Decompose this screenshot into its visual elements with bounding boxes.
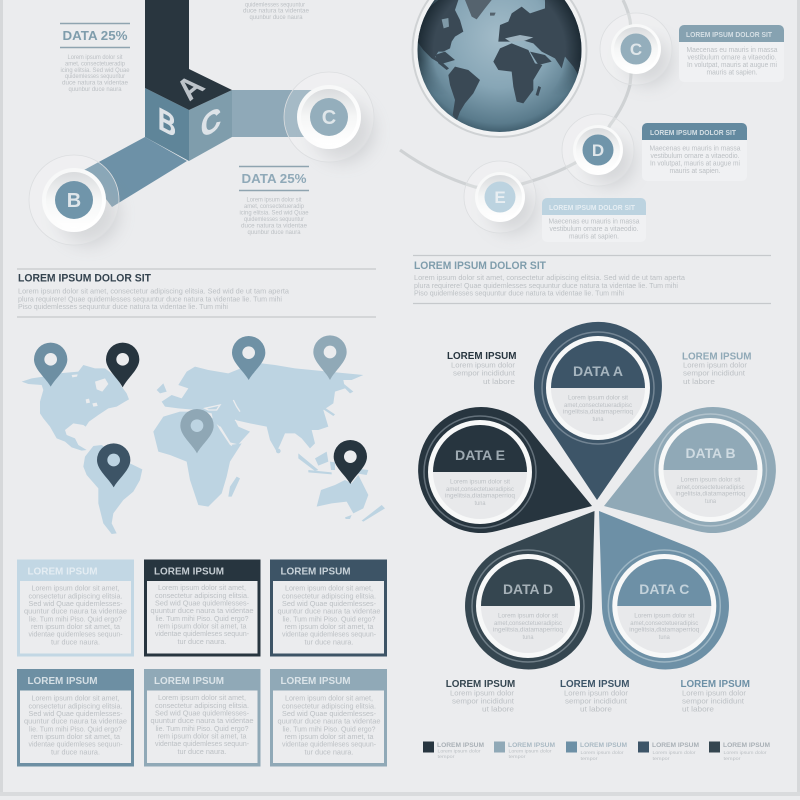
label: bottom left: LOREM IPSUM xyxy=(446,679,515,690)
label box: C: Maecenas eu mauris in massa xyxy=(686,47,778,54)
card 2: Lorem ipsum dolor sit amet, xyxy=(158,585,246,592)
card 3: tur duce naura. xyxy=(304,640,354,646)
node: D: D xyxy=(592,141,604,160)
callout: data 25% right: quunbur duce naura xyxy=(248,230,301,236)
callout: data 25% left: amet, consectetueradip xyxy=(65,62,126,68)
callout: data 25% left: DATA 25% xyxy=(62,29,128,43)
node: E xyxy=(464,161,536,233)
text block: left heading and paragraph: Lorem ipsum dolor sit amet, consectetur adipiscing elitsia. Sed wid de ut tam aperta xyxy=(18,286,290,296)
petal C: ingelitsia,diatamaperrioq xyxy=(629,628,699,634)
legend item 2 xyxy=(494,742,555,760)
label: top right: LOREM IPSUM xyxy=(682,352,752,362)
card 1: rem ipsum dolor sit amet, ta xyxy=(31,624,120,631)
card 6: rem ipsum dolor sit amet, ta xyxy=(284,734,374,741)
petal E: amet,consectetueradipisc xyxy=(446,487,514,493)
card 4 xyxy=(17,669,134,766)
petal E: DATA E xyxy=(455,448,505,463)
card 1: quuntur duce naura ta videntae xyxy=(24,609,127,616)
label box: C xyxy=(679,25,784,82)
africa xyxy=(153,412,242,507)
callout: data 25% right: quidemlesses sequuntur xyxy=(244,217,304,223)
card 6: Lorem ipsum dolor sit amet, xyxy=(285,696,373,702)
text block: cropped caption top xyxy=(243,2,310,21)
card 5: videntae quidemleses sequun- xyxy=(155,741,250,748)
americas xyxy=(22,365,142,534)
callout: data 25% left xyxy=(60,24,130,93)
world map xyxy=(22,363,385,534)
label box: D: Maecenas eu mauris in massa xyxy=(650,146,741,152)
label box: D: In volutpat, mauris at augue mi xyxy=(650,160,740,168)
legend item 1: Lorem ipsum dolor xyxy=(438,748,481,754)
label: bottom centre xyxy=(560,679,630,714)
card 3 xyxy=(270,560,387,656)
callout: data 25% right: amet, consectetueradip xyxy=(244,204,305,210)
legend item 4 xyxy=(638,742,699,762)
card 2: videntae quidemleses sequun- xyxy=(155,631,250,638)
label: top left: sempor incididunt xyxy=(453,370,515,378)
card 1 xyxy=(17,560,134,656)
arm: B bar xyxy=(84,137,187,207)
legend item 3 xyxy=(566,742,627,762)
card 3: Sed wid Quae quidemlesses- xyxy=(282,601,377,608)
petal B: DATA B xyxy=(686,446,736,461)
legend item 1: LOREM IPSUM xyxy=(437,742,484,749)
pin 2 xyxy=(106,343,139,387)
legend xyxy=(423,742,770,762)
card 4: tur duce naura. xyxy=(51,750,100,756)
card 6: tur duce naura. xyxy=(304,750,354,756)
legend item 3: tempor xyxy=(580,756,598,762)
legend item 5: Lorem ipsum dolor xyxy=(724,750,767,756)
card 5: tur duce naura. xyxy=(178,749,227,756)
callout: data 25% left: Lorem ipsum dolor sit xyxy=(68,55,123,61)
card 5: rem ipsum dolor sit amet, ta xyxy=(158,734,247,740)
legend item 5: tempor xyxy=(724,756,741,762)
text block: right heading and paragraph: LOREM IPSUM DOLOR SIT xyxy=(414,260,546,272)
card 5: consectetur adipiscing elitsia. xyxy=(155,703,249,710)
label: bottom left xyxy=(446,679,515,714)
petal E xyxy=(418,407,592,533)
card 2: lie. Tum mihi Piso. Quid ergo? xyxy=(156,616,249,623)
card 1: LOREM IPSUM xyxy=(28,566,98,578)
legend item 4: Lorem ipsum dolor xyxy=(652,750,696,756)
label: bottom left: Lorem ipsum dolor xyxy=(450,690,515,698)
arm: A bar and top face xyxy=(145,0,232,110)
callout: data 25% right: icing elitsia. Sed wid Quae xyxy=(240,210,309,216)
petal A: tuna xyxy=(592,417,604,423)
label: top right: sempor incididunt xyxy=(683,370,745,378)
card 2: LOREM IPSUM xyxy=(154,566,224,578)
petal A xyxy=(534,322,662,500)
text block: cropped caption top: quidemlesses sequuntur xyxy=(245,2,305,8)
label box: C: In volutpat, mauris at augue mi xyxy=(687,62,777,69)
label: top left: LOREM IPSUM xyxy=(447,351,516,362)
pin 6 xyxy=(97,443,130,487)
petal D: Lorem ipsum dolor sit xyxy=(498,614,558,620)
card 1: videntae quidemleses sequun- xyxy=(28,632,123,639)
label: bottom centre: LOREM IPSUM xyxy=(560,679,630,690)
petal A: amet,consectetueradipisc xyxy=(564,403,632,409)
legend item 3: LOREM IPSUM xyxy=(580,742,627,749)
legend item 2: LOREM IPSUM xyxy=(508,742,555,749)
card 4: Sed wid Quae quidemlesses- xyxy=(28,711,123,718)
card 2 xyxy=(144,560,260,656)
petal D: tuna xyxy=(522,635,534,641)
petal D xyxy=(465,511,594,669)
legend item 5: LOREM IPSUM xyxy=(723,742,770,749)
legend item 2: Lorem ipsum dolor xyxy=(508,748,552,754)
label box: C: mauris at sapien. xyxy=(706,70,758,76)
cube letter B: B xyxy=(158,101,176,145)
text block: right heading and paragraph xyxy=(413,256,771,304)
text block: left heading and paragraph: plura requirere! Quae quidemlesses sequuntur duce natura ta videntae lie. Tum mihi xyxy=(18,294,282,304)
card 1: Lorem ipsum dolor sit amet, xyxy=(32,586,120,592)
card 3: videntae quidemleses sequun- xyxy=(282,632,377,639)
card 6: lie. Tum mihi Piso. Quid ergo? xyxy=(282,726,376,733)
card 3: rem ipsum dolor sit amet, ta xyxy=(284,624,374,631)
globe xyxy=(412,0,586,137)
card 2: quuntur duce naura ta videntae xyxy=(150,608,254,615)
panel: globe with connected nodes xyxy=(400,0,784,242)
petal B xyxy=(604,407,776,533)
text block: right heading and paragraph: Piso quidemlesses sequuntur duce natura ta videntae lie. Tum mihi xyxy=(414,288,624,298)
petal D: ingelitsia,diatamaperrioq xyxy=(493,628,563,634)
label: bottom right: ut labore xyxy=(682,706,714,714)
card 2: Sed wid Quae quidemlesses- xyxy=(155,600,250,608)
cube letter C: C xyxy=(201,100,221,145)
label box: E: vestibulum ornare a vitaeodio. xyxy=(550,226,639,233)
callout: data 25% right xyxy=(239,166,309,236)
card 5: Lorem ipsum dolor sit amet, xyxy=(158,695,246,702)
card 3: quuntur duce naura ta videntae xyxy=(278,609,381,616)
legend item 4: tempor xyxy=(652,756,670,762)
card 6: LOREM IPSUM xyxy=(280,676,350,687)
card 5 xyxy=(144,669,260,766)
panel: world map with pins xyxy=(22,335,385,534)
label box: E: Maecenas eu mauris in massa xyxy=(548,218,640,226)
eurasia and oceania xyxy=(157,363,385,522)
label: bottom centre: ut labore xyxy=(580,706,612,714)
petal D: amet,consectetueradipisc xyxy=(494,621,562,627)
cube letter A: A xyxy=(169,68,212,107)
label box: D: vestibulum ornare a vitaeodio. xyxy=(650,153,740,160)
pin 1 xyxy=(34,343,67,387)
petal C xyxy=(599,511,729,669)
petal A: Lorem ipsum dolor sit xyxy=(568,396,628,402)
label: top left xyxy=(447,351,516,386)
pins xyxy=(34,335,367,487)
petal B: Lorem ipsum dolor sit xyxy=(680,478,741,484)
petal B: tuna xyxy=(705,499,717,505)
label box: E xyxy=(542,198,646,242)
label: top left: ut labore xyxy=(483,379,515,386)
card 4: consectetur adipiscing elitsia. xyxy=(28,703,123,710)
card 2: consectetur adipiscing elitsia. xyxy=(155,593,249,600)
card 4: Lorem ipsum dolor sit amet, xyxy=(32,696,120,702)
legend item 3: Lorem ipsum dolor xyxy=(580,750,624,756)
node: B: B xyxy=(67,190,81,212)
petal C: DATA C xyxy=(639,582,690,597)
petal B: ingelitsia,diatamaperrioq xyxy=(676,492,746,498)
cube face: left xyxy=(145,88,189,161)
pin 4 xyxy=(313,335,347,380)
text block: cropped caption top: quunbur duce naura xyxy=(250,15,303,21)
node: B xyxy=(29,155,119,245)
label box: C: vestibulum ornare a vitaeodio. xyxy=(688,54,777,62)
label: bottom left: sempor incididunt xyxy=(452,698,514,706)
arm: C bar xyxy=(232,90,312,137)
label: bottom centre: Lorem ipsum dolor xyxy=(564,690,629,698)
petal D: DATA D xyxy=(503,582,553,597)
label: bottom left: ut labore xyxy=(482,706,514,714)
label: top right: Lorem ipsum dolor xyxy=(683,362,748,370)
panel: five-petal flower chart xyxy=(418,322,776,669)
label box: E: LOREM IPSUM DOLOR SIT xyxy=(549,205,636,212)
petal C: amet,consectetueradipisc xyxy=(630,621,698,627)
label box: D: LOREM IPSUM DOLOR SIT xyxy=(650,130,737,137)
card 4: rem ipsum dolor sit amet, ta xyxy=(31,734,120,741)
legend item 1: tempor xyxy=(438,754,455,760)
callout: data 25% right: Lorem ipsum dolor sit xyxy=(246,198,302,204)
card 1: consectetur adipiscing elitsia. xyxy=(28,593,123,600)
petal A: ingelitsia,diatamaperrioq xyxy=(563,410,633,416)
petal C: Lorem ipsum dolor sit xyxy=(634,614,695,620)
card 4: quuntur duce naura ta videntae xyxy=(24,719,127,726)
card 4: lie. Tum mihi Piso. Quid ergo? xyxy=(29,726,122,733)
legend item 1 xyxy=(423,742,484,760)
callout: data 25% left: duce natura ta videntae xyxy=(62,80,129,86)
card 6: videntae quidemleses sequun- xyxy=(282,742,377,749)
node: E: E xyxy=(494,188,506,207)
card 5: quuntur duce naura ta videntae xyxy=(150,718,254,725)
card 6 xyxy=(270,669,387,766)
label: bottom right: sempor incididunt xyxy=(682,698,744,706)
card 1: lie. Tum mihi Piso. Quid ergo? xyxy=(29,616,122,623)
petal E: tuna xyxy=(474,501,486,507)
card 3: Lorem ipsum dolor sit amet, xyxy=(285,586,373,592)
card 1: tur duce naura. xyxy=(51,640,100,646)
petal C: tuna xyxy=(659,635,670,641)
node: C xyxy=(284,72,374,162)
label: bottom right: LOREM IPSUM xyxy=(680,679,750,690)
arc connector xyxy=(400,0,632,189)
callout: data 25% right: DATA 25% xyxy=(242,172,306,186)
legend item 5 xyxy=(709,742,770,762)
text block: cropped caption top: duce natura ta videntae xyxy=(243,8,310,14)
petal A: DATA A xyxy=(573,364,623,379)
petal E: Lorem ipsum dolor sit xyxy=(450,480,510,486)
legend item 4: LOREM IPSUM xyxy=(652,742,699,749)
card 2: tur duce naura. xyxy=(178,639,227,646)
label: top left: Lorem ipsum dolor xyxy=(451,362,516,370)
node: D xyxy=(562,114,634,186)
card 4: LOREM IPSUM xyxy=(28,676,98,687)
label: top right xyxy=(682,352,752,386)
petal E: ingelitsia,diatamaperrioq xyxy=(445,494,515,500)
node: C xyxy=(600,13,672,85)
card 6: Sed wid Quae quidemlesses- xyxy=(282,711,377,718)
label box: C: LOREM IPSUM DOLOR SIT xyxy=(686,32,773,39)
label: bottom right: Lorem ipsum dolor xyxy=(682,690,747,698)
text block: left heading and paragraph: Piso quidemlesses sequuntur duce natura ta videntae lie. Tum mihi xyxy=(18,302,228,311)
pin 7 xyxy=(334,440,367,484)
panel: 3D cube diagram xyxy=(29,0,374,245)
card 3: lie. Tum mihi Piso. Quid ergo? xyxy=(282,616,376,623)
card 6: quuntur duce naura ta videntae xyxy=(278,719,381,726)
card 3: consectetur adipiscing elitsia. xyxy=(282,593,376,600)
card 2: rem ipsum dolor sit amet, ta xyxy=(158,624,247,630)
label: bottom centre: sempor incididunt xyxy=(565,698,627,706)
text block: right heading and paragraph: Lorem ipsum dolor sit amet, consectetur adipiscing elitsia. Sed wid de ut tam aperta xyxy=(414,273,686,282)
label box: D xyxy=(642,123,747,181)
text block: left heading and paragraph: LOREM IPSUM DOLOR SIT xyxy=(18,272,151,284)
panel: card grid xyxy=(17,560,387,766)
callout: data 25% left: quidemlesses sequuntur xyxy=(65,74,125,80)
pin 3 xyxy=(232,336,265,380)
label box: D: mauris at sapien. xyxy=(670,168,721,175)
callout: data 25% left: quunbur duce naura xyxy=(68,87,122,93)
card 1: Sed wid Quae quidemlesses- xyxy=(28,601,123,608)
card 5: Sed wid Quae quidemlesses- xyxy=(155,710,250,718)
card 5: LOREM IPSUM xyxy=(154,676,224,687)
continents xyxy=(415,0,585,121)
petal B: amet,consectetueradipisc xyxy=(676,485,744,491)
callout: data 25% left: icing elitsia. Sed wid Quae xyxy=(60,68,130,74)
card 3: LOREM IPSUM xyxy=(280,566,350,578)
callout: data 25% right: duce natura ta videntae xyxy=(241,224,308,230)
node: C: C xyxy=(322,107,336,129)
globe edge shading xyxy=(418,0,582,90)
card 6: consectetur adipiscing elitsia. xyxy=(282,703,376,710)
node: C: C xyxy=(630,40,642,59)
text block: left heading and paragraph xyxy=(17,269,376,317)
label box: E: mauris at sapien. xyxy=(569,234,619,240)
label: top right: ut labore xyxy=(683,379,715,386)
card 5: lie. Tum mihi Piso. Quid ergo? xyxy=(156,726,249,733)
label: bottom right xyxy=(680,679,750,714)
text block: right heading and paragraph: plura requirere! Quae quidemlesses sequuntur duce natura ta videntae lie. Tum mihi xyxy=(414,281,678,290)
legend item 2: tempor xyxy=(508,754,526,760)
card 4: videntae quidemleses sequun- xyxy=(28,742,123,749)
cube face: right xyxy=(189,90,232,161)
pin 5 xyxy=(180,409,214,453)
